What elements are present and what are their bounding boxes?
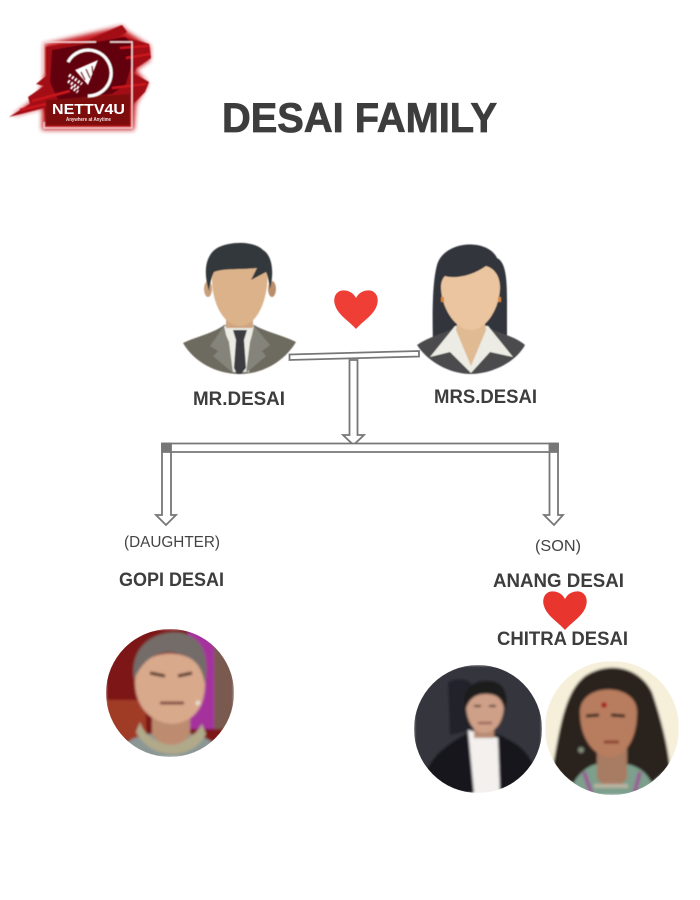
portrait: Anang Desai (414, 665, 542, 793)
label: Mr. Desai: MR.DESAI (193, 389, 285, 410)
icon: Mrs. Desai avatar (417, 244, 525, 374)
logo: NETTV4U: Anywhere at Anytime (66, 117, 111, 123)
label: daughter relation: (DAUGHTER) (124, 534, 220, 551)
icon: heart between parents (334, 290, 378, 329)
logo: NETTV4U: NETTV4U (52, 102, 125, 118)
title: DESAI FAMILY (222, 94, 497, 141)
label: Anang Desai: ANANG DESAI (493, 571, 624, 592)
connector: sibling bar with arrows (156, 444, 563, 525)
label: Gopi Desai: GOPI DESAI (119, 570, 224, 591)
label: Chitra Desai: CHITRA DESAI (497, 629, 628, 650)
label: Mrs. Desai: MRS.DESAI (434, 387, 537, 408)
icon: heart between Anang and Chitra (543, 591, 587, 630)
logo: NETTV4U (9, 25, 151, 130)
icon: Mr. Desai avatar (183, 243, 296, 374)
portrait: Chitra Desai (545, 661, 679, 795)
portrait: Gopi Desai (106, 629, 234, 757)
connector: parents link with arrow down (290, 351, 419, 445)
label: son relation: (SON) (535, 538, 581, 555)
